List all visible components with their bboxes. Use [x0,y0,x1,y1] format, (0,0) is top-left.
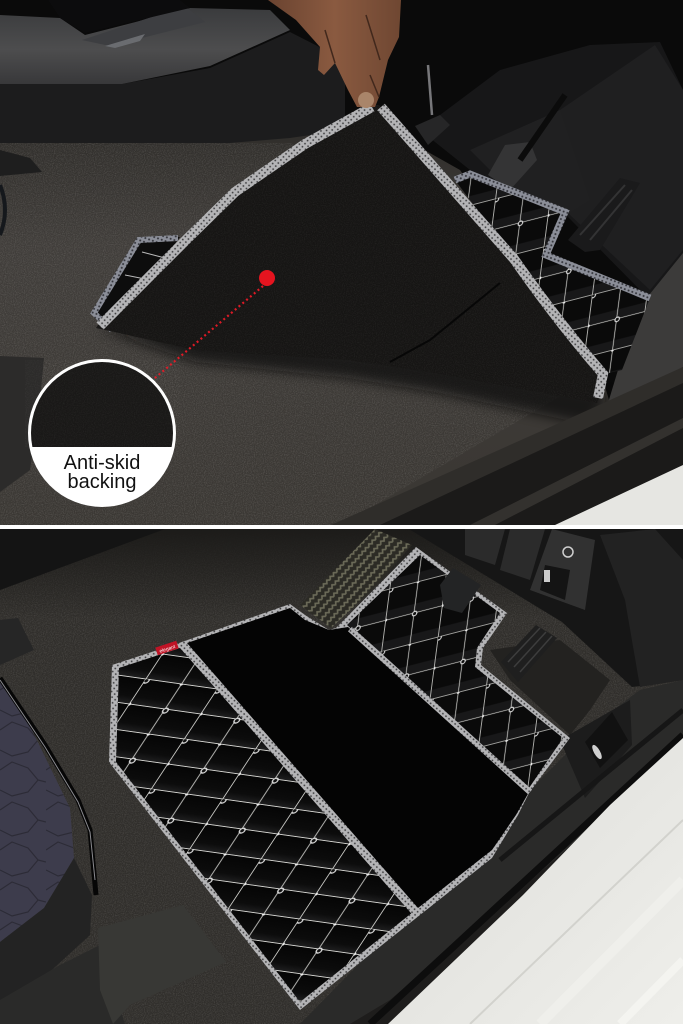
brake pedal [440,568,481,613]
door sill [331,367,683,525]
background: dark car interior [0,0,683,525]
quilted left section [116,648,413,1002]
pedal well [490,640,610,735]
divider strips [183,629,530,912]
seat cushion [0,678,96,1000]
left console base [0,150,42,176]
white car body [388,738,683,1024]
black trim upper left [0,529,165,590]
plain black centre panel [187,608,529,908]
shadow under mat [96,328,610,425]
mat underside: anti-skid felt backing [90,100,620,410]
hand holding the mat [268,0,401,108]
mat border [109,547,570,1010]
right wall trim [609,253,683,400]
callout: anti-skid backing lens [25,360,180,505]
exposed top side of mat, right [455,172,650,375]
seat rail upper left [0,618,34,665]
panel: mat fitted in car [0,529,683,1024]
centre console [0,0,345,150]
floor carpet background [0,529,683,1024]
accelerator pedal [508,625,557,672]
mat corner, left flap [94,237,180,330]
quilted right section [347,555,563,788]
door sill [300,680,683,1024]
callout label: Anti-skid [64,452,140,474]
lens texture [26,362,173,447]
pedal well carpet [420,42,683,300]
brand tag [155,641,179,655]
red marker dot [259,270,275,286]
pedals [415,65,640,252]
floor mat, top view [109,547,570,1010]
dashboard and switches [409,529,683,687]
seat bracket block [0,905,226,1024]
panel: mat lifted to show backing [0,0,683,525]
brand tag: elegant [159,644,177,655]
footrest / zigzag pedal [300,529,412,628]
floor carpet [0,125,612,525]
dotted leader line [155,286,263,378]
callout label second line: backing [68,471,136,493]
